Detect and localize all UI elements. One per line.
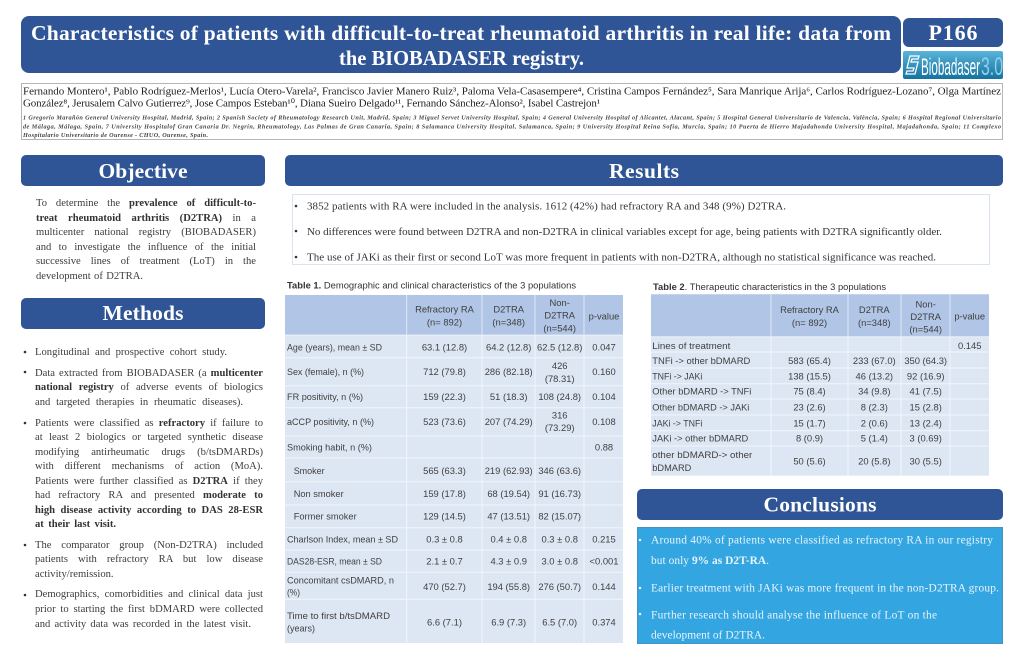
authors and affiliations <box>22 84 1002 140</box>
table 2: therapeutic characteristics: 41 (7.5) <box>910 386 942 397</box>
table 2: therapeutic characteristics: 138 (15.5) <box>788 371 831 382</box>
table 2 caption: Table 2. Therapeutic characteristics in the 3 populations <box>653 281 886 292</box>
table 1: demographic and clinical characteristics: 47 (13.51) <box>487 511 530 522</box>
table 1: demographic and clinical characteristics: (78.31) <box>545 373 575 384</box>
table 2: therapeutic characteristics: 20 (5.8) <box>858 456 890 467</box>
table 1: demographic and clinical characteristics: Charlson Index, mean ± SD <box>287 534 398 545</box>
logo: Biobadaser 3.0: 3.0 <box>981 53 1003 81</box>
table 1: demographic and clinical characteristics: Former smoker <box>294 511 357 522</box>
table 1: demographic and clinical characteristics: (n=544) <box>543 322 576 333</box>
table 1: demographic and clinical characteristics: 219 (62.93) <box>485 465 533 476</box>
table 2: therapeutic characteristics: Non- <box>916 298 936 309</box>
table 2: therapeutic characteristics: 15 (1.7) <box>793 417 826 428</box>
authors and affiliations: 1 Gregorio Marañón General University Hospital, Madrid, Spain; 2 Spanish Society of Rheumatology Research Unit, Madrid, Spain; 3 Miguel Servet University Hospital, Spain; 4 General University Hospital of Alicantet, Alacant, Spain; 5 Hospital General Universitario de Valencia, València, Spain; 6 Hospital Regional Universitario <box>23 114 1001 121</box>
table 1: demographic and clinical characteristics: (n= 892) <box>427 316 462 327</box>
table 2: therapeutic characteristics: (n= 892) <box>792 317 827 328</box>
table 1: demographic and clinical characteristics: 6.6 (7.1) <box>427 616 462 627</box>
table 1: demographic and clinical characteristics: 346 (63.6) <box>538 465 581 476</box>
table 2: therapeutic characteristics: 46 (13.2) <box>856 371 893 382</box>
table 2: therapeutic characteristics: 50 (5.6) <box>793 456 826 467</box>
table 2: therapeutic characteristics: p-value <box>954 311 985 322</box>
table 1: demographic and clinical characteristics: Age (years), mean ± SD <box>287 342 382 353</box>
table 2: therapeutic characteristics: 8 (0.9) <box>796 433 823 444</box>
title banner <box>21 16 901 73</box>
methods text: national registry of adverse events of biologics <box>35 382 263 393</box>
table 1: demographic and clinical characteristics: 129 (14.5) <box>423 511 466 522</box>
methods text: and activity data was recorded in the latest visit. <box>35 619 251 630</box>
title banner: Characteristics of patients with difficult-to-treat rheumatoid arthritis in real life: data from <box>31 21 891 45</box>
table 1: demographic and clinical characteristics: 0.160 <box>592 366 616 377</box>
table 1: demographic and clinical characteristics: 63.1 (12.8) <box>422 342 467 353</box>
conclusions panel: Earlier treatment with JAKi was more frequent in the non-D2TRA group. <box>651 583 999 595</box>
table 1: demographic and clinical characteristics: 0.3 ± 0.8 <box>541 534 578 545</box>
table 1: demographic and clinical characteristics: 276 (50.7) <box>538 581 581 592</box>
table 2: therapeutic characteristics: Lines of treatment <box>652 340 731 351</box>
table 1: demographic and clinical characteristics: (n=348) <box>492 316 525 327</box>
methods text: high disease activity according to DAS 28-ESR <box>35 505 263 516</box>
table 1: demographic and clinical characteristics: 565 (63.3) <box>423 465 466 476</box>
table 1: demographic and clinical characteristics: Smoker <box>294 465 325 476</box>
objective text: development of D2TRA. <box>36 271 143 282</box>
heading: Conclusions <box>637 489 1003 520</box>
table 1: demographic and clinical characteristics: aCCP positivity, n (%) <box>287 416 374 427</box>
table 2: therapeutic characteristics: 0.145 <box>958 340 981 351</box>
table 2: therapeutic characteristics: 350 (64.3) <box>904 355 947 366</box>
table 1: demographic and clinical characteristics: 91 (16.73) <box>538 488 581 499</box>
table 2: therapeutic characteristics: other bDMARD-> other <box>652 449 752 460</box>
methods text: Demographics, comorbidities and clinical data just <box>35 589 263 600</box>
conclusions panel: but only 9% as D2T-RA. <box>651 555 769 567</box>
methods text: had refractory RA and presented moderate to <box>35 490 263 501</box>
table 2: therapeutic characteristics: 30 (5.5) <box>910 456 942 467</box>
results findings: No differences were found between D2TRA and non-D2TRA in clinical variables except for age, being patients with D2TRA significantly older. <box>307 226 942 238</box>
table 2: therapeutic characteristics: Other bDMARD -> JAKi <box>652 402 749 413</box>
table 1: demographic and clinical characteristics: 68 (19.54) <box>487 488 530 499</box>
poster number P166 <box>903 18 1003 47</box>
table 1: demographic and clinical characteristics: 0.047 <box>592 342 616 353</box>
table 2: therapeutic characteristics: 5 (1.4) <box>861 433 888 444</box>
authors and affiliations: González⁸, Jerusalem Calvo Gutierrez⁹, Jose Campos Esteban¹⁰, Diana Sueiro Delgado¹¹, Fernando Sánchez-Alonso², Isabel Castrejon¹ <box>23 98 600 110</box>
table 1: demographic and clinical characteristics: <0.001 <box>590 556 618 567</box>
table 2: therapeutic characteristics: 2 (0.6) <box>861 417 888 428</box>
table 1: demographic and clinical characteristics: Concomitant csDMARD, n <box>287 574 394 585</box>
table 1: demographic and clinical characteristics: 0.144 <box>592 581 616 592</box>
methods text: Longitudinal and prospective cohort study. <box>35 347 227 358</box>
table 1: demographic and clinical characteristics: 0.215 <box>592 534 616 545</box>
heading: Results: Results <box>609 159 679 183</box>
heading: Results <box>285 155 1003 186</box>
results findings: The use of JAKi as their first or second LoT was more frequent in patients with non-D2TRA, although no statistical significance was reached. <box>307 252 936 264</box>
table 1: demographic and clinical characteristics: 4.3 ± 0.9 <box>490 556 527 567</box>
methods text: modifying antirheumatic drugs (b/tsDMARDs) <box>35 447 263 458</box>
table 1: demographic and clinical characteristics: 6.5 (7.0) <box>542 616 577 627</box>
methods text: patients with refractory RA but low disease <box>35 554 263 565</box>
table 1: demographic and clinical characteristics: 82 (15.07) <box>538 511 581 522</box>
methods text: prior to starting the first bDMARD were collected <box>35 604 263 615</box>
table 1: demographic and clinical characteristics: 51 (18.3) <box>490 391 527 402</box>
table 1: demographic and clinical characteristics: 0.4 ± 0.8 <box>490 534 527 545</box>
table 1: demographic and clinical characteristics: 108 (24.8) <box>538 391 581 402</box>
authors and affiliations: Fernando Montero¹, Pablo Rodríguez-Merlos¹, Lucía Otero-Varela², Francisco Javier Manero Ruiz³, Paloma Vela-Casasempere⁴, Cristina Campos Fernández⁵, Sara Manrique Arija⁶, Carlos Rodríguez-Lozano⁷, Olga Martínez <box>23 85 1001 97</box>
table 1: demographic and clinical characteristics: 0.3 ± 0.8 <box>426 534 463 545</box>
table 1: demographic and clinical characteristics: 207 (74.29) <box>485 416 533 427</box>
table 1: demographic and clinical characteristics: 0.104 <box>592 391 616 402</box>
table 2: therapeutic characteristics: bDMARD <box>652 462 692 473</box>
table 2: therapeutic characteristics <box>651 294 989 476</box>
logo: Biobadaser 3.0 <box>903 51 1003 81</box>
methods bullet markers <box>24 351 26 596</box>
conclusions panel <box>638 528 1002 644</box>
table 2: therapeutic characteristics: 75 (8.4) <box>793 386 826 397</box>
table 1: demographic and clinical characteristics: 712 (79.8) <box>423 366 466 377</box>
table 2: therapeutic characteristics: 233 (67.0) <box>853 355 896 366</box>
table 1: demographic and clinical characteristics: Smoking habit, n (%) <box>287 442 372 453</box>
methods text: at least 2 biologics or targeted synthetic disease <box>35 432 263 443</box>
table 1: demographic and clinical characteristics: 62.5 (12.8) <box>537 342 582 353</box>
table 1: demographic and clinical characteristics: Sex (female), n (%) <box>287 366 364 377</box>
conclusions panel: Further research should analyse the influence of LoT on the <box>651 609 937 621</box>
methods text: and targeted therapies in rheumatic diseases). <box>35 397 243 408</box>
methods text: at their last visit. <box>35 519 116 530</box>
methods text <box>35 347 263 630</box>
table 1: demographic and clinical characteristics: 0.108 <box>592 416 616 427</box>
table 1: demographic and clinical characteristics: Non smoker <box>294 488 344 499</box>
table 1: demographic and clinical characteristics: (years) <box>287 623 315 634</box>
results findings <box>292 194 990 264</box>
table 2: therapeutic characteristics: TNFi -> other bDMARD <box>652 355 751 366</box>
table 1: demographic and clinical characteristics: 3.0 ± 0.8 <box>541 556 578 567</box>
conclusions panel: development of D2TRA. <box>651 630 765 642</box>
table 2: therapeutic characteristics: Other bDMARD -> TNFi <box>652 386 751 397</box>
heading: Objective <box>21 155 265 186</box>
table 1: demographic and clinical characteristics: 316 <box>552 410 568 421</box>
conclusions panel: Around 40% of patients were classified as refractory RA in our registry <box>651 535 993 547</box>
table 2: therapeutic characteristics: TNFi -> JAKi <box>652 371 702 382</box>
table 1: demographic and clinical characteristics: 194 (55.8) <box>487 581 530 592</box>
heading: Methods <box>21 298 265 329</box>
table 1: demographic and clinical characteristics: FR positivity, n (%) <box>287 391 363 402</box>
methods text: with different mechanisms of action (MoA). <box>35 461 263 472</box>
authors and affiliations: de Málaga, Málaga, Spain, 7 University Hospitalof Gran Canaria Dr. Negrín, Rheumatology, Las Palmas de Gran Canaria, Spain; 8 Salamanca University Hospital, Salamanca, Spain; 9 University Hospital Reina Sofía, Murcia, Spain; 10 Puerta de Hierro Majadahonda University Hospital, Majadahonda, Spain; 11 Complexo <box>23 124 1001 131</box>
table 1: demographic and clinical characteristics: 6.9 (7.3) <box>491 616 526 627</box>
table 2: therapeutic characteristics: JAKi -> TNFi <box>652 417 702 428</box>
methods text: Patients were classified as refractory if failure to <box>35 418 263 429</box>
table 1: demographic and clinical characteristics: (%) <box>287 587 300 598</box>
title banner: the BIOBADASER registry. <box>339 46 584 70</box>
table 2: therapeutic characteristics: 15 (2.8) <box>910 402 942 413</box>
table 1: demographic and clinical characteristics: 470 (52.7) <box>423 581 466 592</box>
objective text: and to investigate the influence of the initial <box>36 242 256 253</box>
table 1 caption: Table 1. Demographic and clinical characteristics of the 3 populations <box>287 280 576 290</box>
objective text <box>36 198 256 282</box>
table 2: therapeutic characteristics: 8 (2.3) <box>861 402 888 413</box>
table 1: demographic and clinical characteristics: 426 <box>552 360 568 371</box>
table 2: therapeutic characteristics: JAKi -> other bDMARD <box>652 433 749 444</box>
table 1: demographic and clinical characteristics: Refractory RA <box>415 304 475 315</box>
heading: Objective: Objective <box>98 159 188 183</box>
heading: Conclusions: Conclusions <box>764 493 876 517</box>
table 1: demographic and clinical characteristics: (73.29) <box>545 422 575 433</box>
table 2: therapeutic characteristics: D2TRA <box>910 311 942 322</box>
table 1: demographic and clinical characteristics: 0.374 <box>592 616 616 627</box>
table 2: therapeutic characteristics: Refractory RA <box>780 304 840 315</box>
methods text: Data extracted from BIOBADASER (a multicenter <box>35 368 263 378</box>
table 2: therapeutic characteristics: (n=544) <box>909 324 942 335</box>
table 2: therapeutic characteristics: 13 (2.4) <box>910 417 942 428</box>
results findings: 3852 patients with RA were included in the analysis. 1612 (42%) had refractory RA and 348 (9%) D2TRA. <box>307 200 786 212</box>
table 2: therapeutic characteristics: 34 (9.8) <box>858 386 890 397</box>
table 2: therapeutic characteristics: 583 (65.4) <box>788 355 831 366</box>
authors and affiliations: Hospitalario Universitario de Ourense - CHUO, Ourense, Spain. <box>22 132 208 139</box>
table 2: therapeutic characteristics: 23 (2.6) <box>793 402 826 413</box>
table 1: demographic and clinical characteristics: 523 (73.6) <box>423 416 466 427</box>
table 1: demographic and clinical characteristics: D2TRA <box>544 309 576 320</box>
objective text: multicenter national registry (BIOBADASER) <box>36 227 256 238</box>
table 1: demographic and clinical characteristics: 64.2 (12.8) <box>486 342 531 353</box>
table 1: demographic and clinical characteristics: 159 (22.3) <box>423 391 466 402</box>
poster number P166: P166 <box>928 20 978 45</box>
table 1: demographic and clinical characteristics <box>285 295 623 643</box>
table 1: demographic and clinical characteristics: Non- <box>550 297 570 308</box>
table 2: therapeutic characteristics: (n=348) <box>858 317 891 328</box>
table 2: therapeutic characteristics: 92 (16.9) <box>907 371 944 382</box>
table 1: demographic and clinical characteristics: 159 (17.8) <box>423 488 466 499</box>
table 1: demographic and clinical characteristics: 2.1 ± 0.7 <box>426 556 463 567</box>
methods text: The comparator group (Non-D2TRA) included <box>35 540 263 551</box>
methods text: Patients were further classified as D2TRA if they <box>35 476 263 487</box>
heading: Methods: Methods <box>102 301 184 325</box>
table 1: demographic and clinical characteristics: 286 (82.18) <box>485 366 533 377</box>
objective text: successive lines of treatment (LoT) in the <box>36 256 256 267</box>
objective text: treat rheumatoid arthritis (D2TRA) in a <box>36 212 256 224</box>
table 1: demographic and clinical characteristics: p-value <box>589 310 619 321</box>
table 2: therapeutic characteristics: 3 (0.69) <box>910 433 942 444</box>
methods text: activity/remission. <box>35 569 114 580</box>
table 1: demographic and clinical characteristics: Time to first b/tsDMARD <box>287 610 390 621</box>
table 1: demographic and clinical characteristics: 0.88 <box>595 442 613 453</box>
table 1: demographic and clinical characteristics: DAS28-ESR, mean ± SD <box>287 556 382 567</box>
table 1: demographic and clinical characteristics: D2TRA <box>493 304 525 315</box>
table 2: therapeutic characteristics: D2TRA <box>859 304 890 315</box>
objective text: To determine the prevalence of difficult-to- <box>36 198 256 209</box>
